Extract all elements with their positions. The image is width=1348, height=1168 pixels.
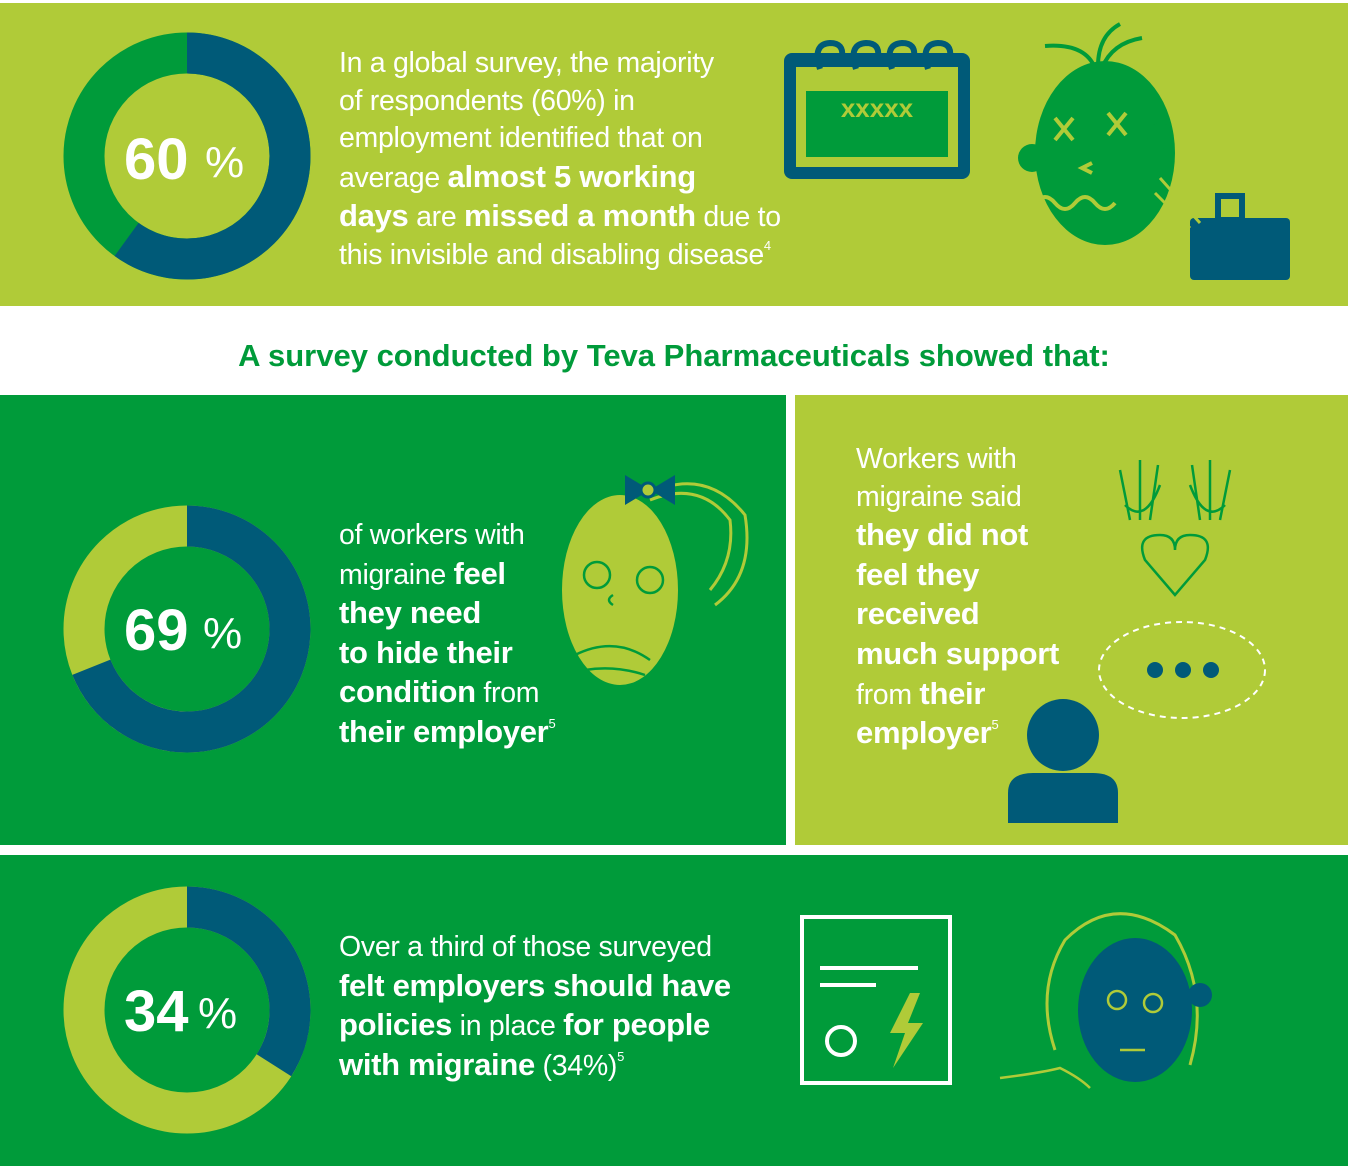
- panel: 69% hide condition: [0, 395, 786, 845]
- text: support statement: migraine said: [856, 481, 1022, 513]
- icon: sick face with briefcase: [1018, 22, 1290, 280]
- text: 69% statement: of workers with: [339, 519, 525, 551]
- text: 60% statement: employment identified that on: [339, 122, 703, 154]
- icon: speech bubble: [1098, 621, 1266, 719]
- text: 60% statement: average almost 5 working: [339, 159, 696, 194]
- text: 60% statement: of respondents (60%) in: [339, 85, 635, 117]
- panel: 34% policies: [0, 855, 1348, 1166]
- text: 60% statement: [339, 47, 781, 271]
- icon: calendar: [784, 40, 970, 179]
- text: support statement: from their: [856, 676, 985, 711]
- donut: 60%: %: [205, 138, 244, 187]
- text: 34% statement: with migraine (34%)5: [339, 1047, 624, 1082]
- text: 69% statement: to hide their: [339, 635, 512, 670]
- donut: 60%: [64, 32, 310, 280]
- text: 69% statement: migraine feel: [339, 556, 506, 591]
- icon: worried girl: [562, 475, 748, 685]
- text: support statement: [856, 443, 1059, 750]
- donut: 60%: 60: [124, 127, 189, 192]
- text: support statement: Workers with: [856, 443, 1017, 475]
- text: 60% statement: In a global survey, the majority: [339, 47, 714, 79]
- text: 34% statement: policies in place for people: [339, 1007, 710, 1042]
- text: 34% statement: Over a third of those surveyed: [339, 931, 712, 963]
- text: 34% statement: felt employers should have: [339, 968, 731, 1003]
- text: 60% statement: days are missed a month due to: [339, 198, 781, 233]
- donut: 69%: 69: [124, 598, 189, 663]
- text: support statement: received: [856, 596, 979, 631]
- donut: 34%: 34: [124, 979, 189, 1044]
- icon: hands and heart: [1118, 460, 1232, 597]
- icon: policy document: [800, 915, 952, 1085]
- panel: support: [795, 395, 1348, 845]
- text: support statement: much support: [856, 636, 1059, 671]
- text: support statement: employer5: [856, 715, 998, 750]
- donut: 34%: %: [198, 989, 237, 1038]
- text: 69% statement: they need: [339, 595, 481, 630]
- icon: calendar: xxxxx: [841, 93, 914, 123]
- text: 34% statement: [338, 931, 731, 1082]
- text: 69% statement: condition from: [339, 674, 539, 709]
- panel: top 60%: [0, 3, 1348, 306]
- donut: 34%: [64, 886, 310, 1134]
- heading: A survey conducted by Teva Pharmaceuticals showed that:: [238, 338, 1110, 373]
- text: 69% statement: [339, 519, 556, 749]
- icon: woman with headache: [1000, 912, 1212, 1089]
- donut: 69%: %: [203, 609, 242, 658]
- text: support statement: they did not: [856, 517, 1028, 552]
- donut: 69%: [64, 506, 310, 752]
- icon: person: [1008, 699, 1118, 823]
- text: 60% statement: this invisible and disabling disease4: [339, 238, 771, 271]
- text: support statement: feel they: [856, 557, 979, 592]
- text: 69% statement: their employer5: [339, 714, 555, 749]
